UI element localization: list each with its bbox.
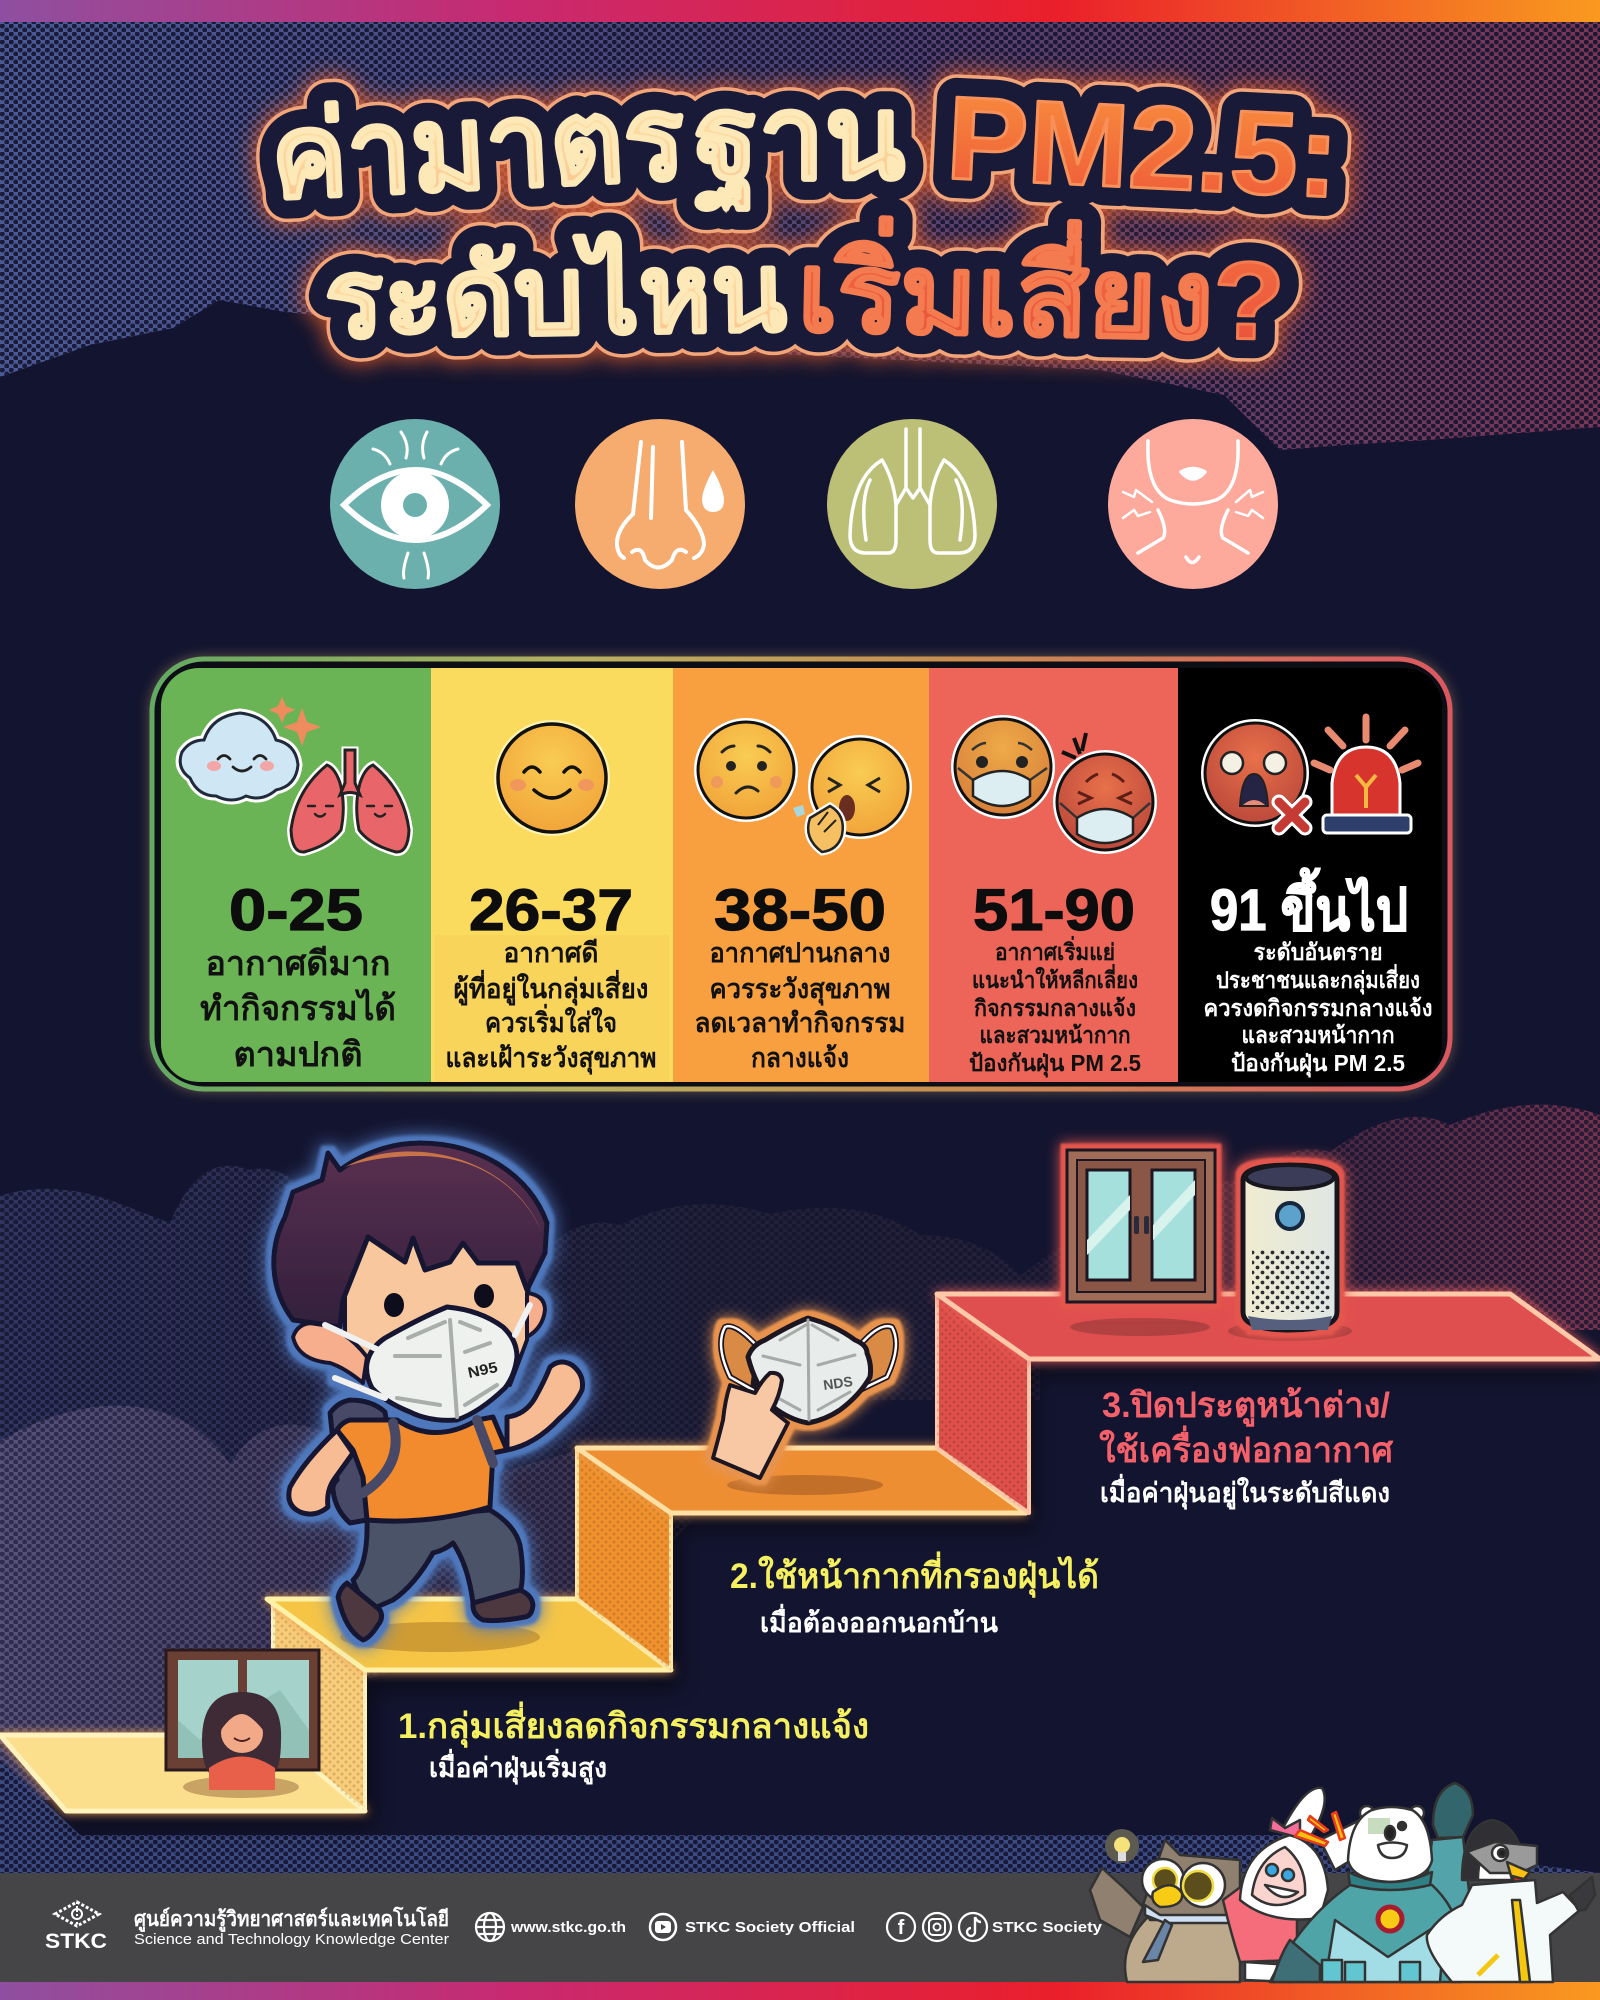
range numbers: 51-90: [973, 878, 1135, 943]
level 26-37 description: ควรเริ่มใส่ใจ: [485, 1003, 617, 1038]
step text 1: เมื่อค่าฝุ่นเริ่มสูง: [429, 1748, 607, 1785]
level 0-25 description: [200, 945, 396, 1074]
background: top halftone haze: [0, 22, 1600, 450]
footer organisation name: Science and Technology Knowledge Center: [134, 1931, 449, 1948]
footer organisation name: [134, 1906, 449, 1948]
title outline: [268, 72, 1342, 363]
boy mask: [367, 1307, 517, 1420]
level 26-37 description: อากาศดี: [504, 938, 598, 968]
level 91+ description: ประชาชนและกลุ่มเสี่ยง: [1216, 963, 1420, 995]
level 0-25 description: อากาศดีมาก: [206, 945, 390, 983]
title glow: [268, 72, 1342, 363]
title glow: เริ่มเสี่ยง?: [797, 215, 1286, 363]
title dark backing: [268, 72, 1342, 363]
range numbers: 38-50: [714, 878, 886, 943]
illustration: closed window: [1067, 1150, 1215, 1302]
boy backpack: [330, 1400, 395, 1523]
stair shadow: [66, 1366, 1600, 1818]
title fill: ระดับไหน: [323, 230, 787, 361]
title fill: เริ่มเสี่ยง?: [797, 215, 1286, 363]
level 51-90 description: กิจกรรมกลางแจ้ง: [974, 995, 1136, 1021]
bunny mascot: [1223, 1788, 1368, 1982]
held mask: [748, 1318, 871, 1423]
bottom gradient bar: [0, 1982, 1600, 2000]
footer social icons and handle: f: [898, 1917, 905, 1939]
step text 3: 3.ปิดประตูหน้าต่าง/: [1102, 1386, 1390, 1427]
level 91+ description: [1204, 939, 1432, 1078]
footer organisation name: ศูนย์ความรู้วิทยาศาสตร์และเทคโนโลยี: [134, 1906, 449, 1933]
owl mascot: [1090, 1840, 1240, 1982]
level 26-37 description: ผู้ที่อยู่ในกลุ่มเสี่ยง: [454, 969, 648, 1006]
title: [268, 72, 1342, 363]
level 26-37 description: และเฝ้าระวังสุขภาพ: [446, 1043, 656, 1075]
top gradient bar: [0, 0, 1600, 22]
boy ears: [293, 1293, 545, 1383]
table colored columns: [161, 668, 1442, 1082]
floor shadows: [183, 1318, 1352, 1798]
level 38-50 description: [694, 938, 906, 1073]
icon: alarmed face and siren: [1201, 717, 1418, 833]
title dark backing: ฐาน: [694, 72, 905, 215]
level 91+ description: ป้องกันฝุ่น PM 2.5: [1231, 1050, 1405, 1078]
step text 3: [1099, 1386, 1394, 1510]
level 51-90 description: อากาศเริ่มแย่: [995, 935, 1115, 965]
title fill: [268, 72, 1342, 363]
range numbers: [229, 868, 1408, 943]
boy strap: [363, 1420, 493, 1493]
boy mask folds and straps: [395, 1320, 497, 1417]
step text 3: ใช้เครื่องฟอกอากาศ: [1099, 1425, 1394, 1470]
title outline: PM2.5:: [944, 72, 1342, 223]
illustration: air purifier: [1243, 1165, 1337, 1330]
step text 1: 1.กลุ่มเสี่ยงลดกิจกรรมกลางแจ้ง: [398, 1701, 869, 1748]
step text 1: [398, 1701, 869, 1785]
range numbers: 0-25: [229, 878, 363, 943]
step 2 floor: [267, 1599, 671, 1670]
level 38-50 description: ลดเวลาทำกิจกรรม: [694, 1008, 906, 1038]
level 91+ description: และสวมหน้ากาก: [1242, 1022, 1394, 1048]
title dark backing: PM2.5:: [944, 72, 1342, 223]
footer youtube: STKC Society Official: [685, 1919, 855, 1936]
level 51-90 description: แนะนำให้หลีกเลี่ยง: [972, 963, 1138, 993]
icon: worried and coughing faces: [694, 718, 912, 852]
boy left arm: [289, 1430, 353, 1514]
step 2 riser: [577, 1448, 671, 1670]
range numbers: 26-37: [469, 878, 633, 943]
boy legs: [353, 1510, 522, 1610]
hand mask print: NDS: [822, 1373, 854, 1393]
footer website: www.stkc.go.th: [510, 1919, 626, 1936]
icon: masked faces: [951, 715, 1157, 854]
footer logo: STKC: [45, 1930, 107, 1953]
title dark backing: เริ่มเสี่ยง?: [797, 215, 1286, 363]
footer social icons and handle: [887, 1913, 1103, 1941]
step 3 floor: [577, 1448, 1026, 1513]
boy hair highlight: [345, 1151, 543, 1235]
title glow: ระดับไหน: [323, 230, 787, 361]
penguin mascot: [1427, 1820, 1595, 1982]
title glow: ฐาน: [694, 72, 905, 215]
mask ear loops: [721, 1326, 896, 1390]
step text 2: 2.ใช้หน้ากากที่กรองฝุ่นได้: [730, 1551, 1099, 1598]
boy eyes: [384, 1284, 494, 1317]
illustration: boy with mask: [274, 1143, 583, 1640]
level 51-90 description: [969, 935, 1141, 1078]
footer youtube: [650, 1914, 855, 1940]
title outline: ฐาน: [694, 72, 905, 215]
footer social icons and handle: STKC Society: [992, 1919, 1103, 1936]
footer band: [0, 1873, 1600, 1982]
level 38-50 description: อากาศปานกลาง: [710, 938, 890, 968]
panel: PM2.5 level table: [152, 659, 1450, 1089]
range numbers: 91 ขึ้นไป: [1210, 868, 1408, 943]
step 1 riser: [273, 1599, 365, 1811]
mascots: [1090, 1783, 1595, 1982]
level 0-25 description: ตามปกติ: [234, 1036, 362, 1074]
level 51-90 description: ป้องกันฝุ่น PM 2.5: [969, 1050, 1141, 1078]
title fill: ค่ามาตร: [268, 72, 688, 224]
level 0-25 description: ทำกิจกรรมได้: [200, 988, 396, 1028]
footer website: [476, 1913, 626, 1941]
title glow: ค่ามาตร: [268, 72, 688, 224]
boy shoes: [338, 1583, 533, 1640]
icon: nose with drop: [575, 419, 745, 589]
title dark backing: ระดับไหน: [323, 230, 787, 361]
icon: lungs: [827, 419, 997, 589]
title fill: PM2.5:: [944, 72, 1342, 223]
level 91+ description: ระดับอันตราย: [1254, 939, 1382, 965]
level 91+ description: ควรงดกิจกรรมกลางแจ้ง: [1204, 995, 1432, 1021]
background: front-left halftone cloud: [0, 1406, 580, 1800]
background: bottom halftone band: [0, 1760, 1600, 1873]
level 38-50 description: ควรระวังสุขภาพ: [710, 974, 890, 1006]
boy shirt: [337, 1417, 507, 1521]
polar bear mascot: [1270, 1783, 1473, 1982]
step text 2: [730, 1551, 1099, 1638]
boy right arm: [507, 1362, 583, 1450]
footer logo: [45, 1902, 107, 1953]
illustration: hand holding mask: [713, 1318, 896, 1478]
hand: [713, 1373, 788, 1478]
light bulb: [1105, 1829, 1139, 1863]
step 3 riser: [937, 1294, 1029, 1513]
step text 3: เมื่อค่าฝุ่นอยู่ในระดับสีแดง: [1100, 1473, 1390, 1510]
title dark backing: ค่ามาตร: [268, 72, 688, 224]
step 1 floor: [0, 1735, 365, 1811]
step 4 floor: [937, 1294, 1600, 1359]
title glow: PM2.5:: [944, 72, 1342, 223]
title outline: ค่ามาตร: [268, 72, 688, 224]
icon: throat: [1108, 419, 1278, 589]
background: middle halftone clouds: [0, 1105, 1600, 1800]
title fill: ฐาน: [694, 72, 905, 215]
level 38-50 description: กลางแจ้ง: [751, 1043, 849, 1073]
illustration: girl at window: [166, 1650, 319, 1790]
step text 2: เมื่อต้องออกนอกบ้าน: [760, 1603, 999, 1638]
table glow border: [152, 659, 1450, 1089]
boy hair: [274, 1143, 547, 1327]
title outline: เริ่มเสี่ยง?: [797, 215, 1286, 363]
boy face: [345, 1230, 530, 1385]
boy mask print: N95: [466, 1359, 499, 1382]
staircase: [0, 1294, 1600, 1818]
title outline: ระดับไหน: [323, 230, 787, 361]
level 26-37 description: [446, 938, 656, 1075]
icon: irritated eye: [330, 419, 500, 589]
icon: happy cloud and lungs: [180, 697, 409, 852]
level 51-90 description: และสวมหน้ากาก: [980, 1022, 1130, 1048]
icon: smiling face: [494, 720, 610, 836]
